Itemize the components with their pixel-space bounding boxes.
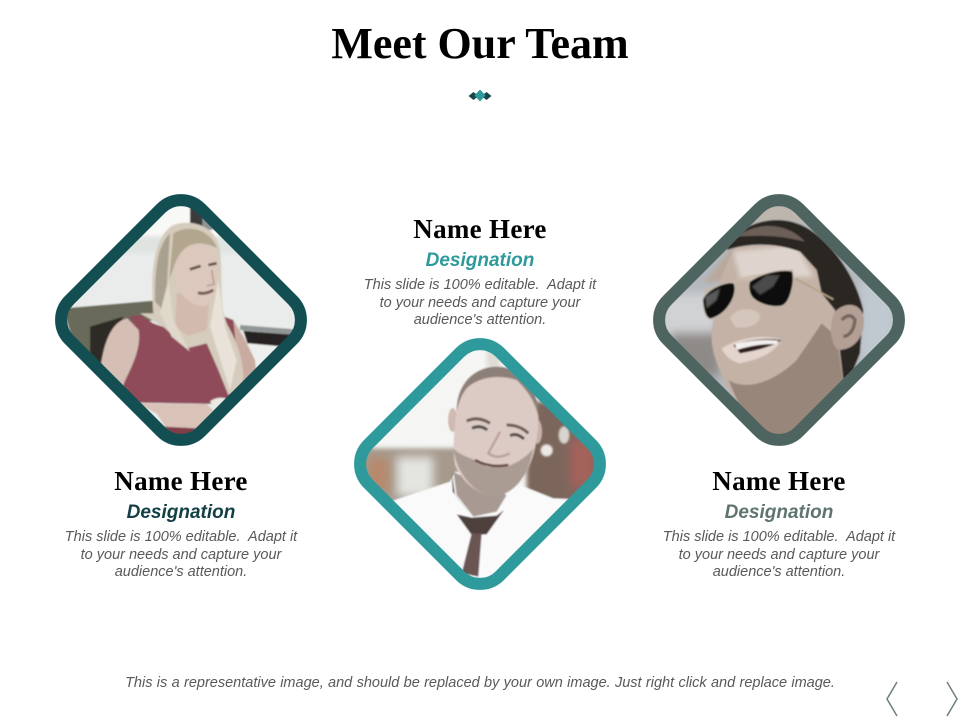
description: audience's attention.: [713, 564, 845, 580]
designation: Designation: [725, 502, 833, 523]
footer note: This is a representative image, and should be replaced by your own image. Just right click and replace image.: [125, 675, 835, 691]
panel: right team member: [653, 194, 905, 576]
photo: smiling man in sunglasses inside grey-green diamond frame: [653, 194, 905, 446]
designation: Designation: [127, 502, 235, 523]
description: audience's attention.: [115, 564, 247, 580]
description: This slide is 100% editable. Adapt it: [65, 529, 298, 545]
name: Name Here: [114, 466, 248, 496]
description: This slide is 100% editable. Adapt it: [663, 529, 896, 545]
description: to your needs and capture your: [380, 295, 582, 311]
name: Name Here: [413, 214, 547, 244]
icon: next arrow: [947, 682, 957, 716]
photo: woman in red dress inside dark teal diamond frame: [55, 194, 307, 446]
panel: left team member: [55, 194, 307, 576]
name: Name Here: [712, 466, 846, 496]
description: to your needs and capture your: [81, 547, 283, 563]
description: This slide is 100% editable. Adapt it: [364, 277, 597, 293]
title: Meet Our Team: [331, 19, 629, 68]
designation: Designation: [426, 250, 534, 271]
photo: man in white shirt and tie inside teal diamond frame: [354, 338, 606, 590]
description: audience's attention.: [414, 312, 546, 328]
icon: previous arrow: [887, 682, 897, 716]
icon: title ornament of three diamonds: [468, 90, 492, 102]
description: to your needs and capture your: [679, 547, 881, 563]
panel: center team member: [354, 220, 606, 590]
